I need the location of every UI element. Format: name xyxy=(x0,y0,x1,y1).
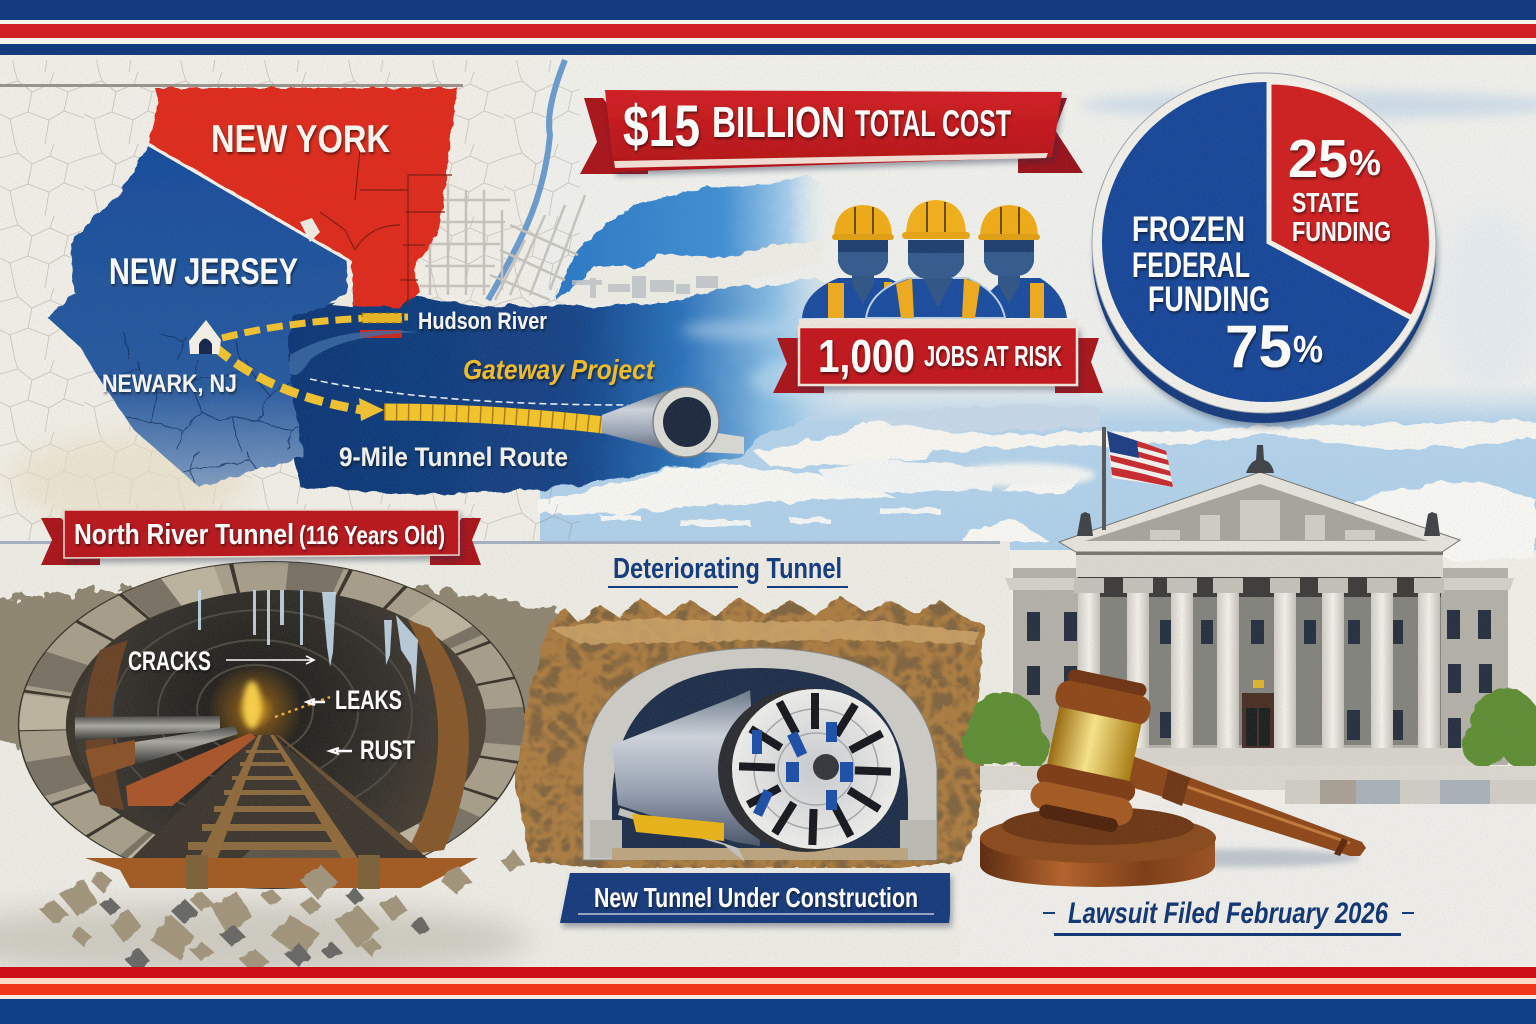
jobs number: 1,000 xyxy=(818,330,915,382)
label state funding xyxy=(1292,187,1391,247)
label: Hudson River: Hudson River xyxy=(418,308,547,335)
tunnel glow xyxy=(243,681,261,729)
label: Newark, NJ: NEWARK, NJ xyxy=(102,370,237,398)
callout: rust xyxy=(330,735,415,765)
columns xyxy=(1078,590,1440,748)
label: 9-Mile Tunnel Route: 9-Mile Tunnel Route xyxy=(339,442,568,472)
water: Hudson and bay xyxy=(280,280,870,495)
yellow tunnel route xyxy=(384,412,604,425)
door xyxy=(1242,680,1274,749)
brick wall xyxy=(0,590,565,770)
New York xyxy=(149,88,458,307)
lamp line xyxy=(275,697,330,717)
cost caption: TOTAL COST xyxy=(855,103,1011,144)
pie chart: funding xyxy=(1092,73,1436,423)
ballast xyxy=(240,850,355,860)
sky with clouds xyxy=(540,60,1536,560)
horizontal rule above map xyxy=(0,84,463,87)
banner: jobs at risk xyxy=(773,319,1103,393)
label frozen federal funding xyxy=(1132,210,1270,319)
label frozen federal funding: FUNDING xyxy=(1148,280,1270,319)
banner age: (116 Years Old) xyxy=(299,520,445,550)
city street grid xyxy=(420,180,585,300)
label: Gateway Project: Gateway Project xyxy=(463,354,655,385)
tunnel interior xyxy=(74,590,486,858)
New Jersey xyxy=(47,145,348,487)
plinth xyxy=(980,766,1536,804)
distant city blocks xyxy=(572,276,718,298)
railway xyxy=(186,735,420,885)
TBM support xyxy=(618,808,745,862)
heading: Deteriorating Tunnel: Deteriorating Tunnel xyxy=(613,553,842,585)
label state funding: FUNDING xyxy=(1292,216,1391,247)
upper bay xyxy=(556,175,840,300)
TBM cutter head xyxy=(718,688,900,852)
state slice 25% xyxy=(1269,82,1431,318)
TBM body xyxy=(612,690,760,846)
label 25 percent: 25 xyxy=(1288,129,1348,189)
label 25 percent xyxy=(1288,129,1381,189)
pipes xyxy=(75,716,238,778)
bottom-left ground haze xyxy=(0,902,530,978)
bottom stripes xyxy=(0,967,1536,1024)
land shading at map bottom xyxy=(10,435,250,525)
label 75 percent: 75 xyxy=(1225,313,1292,380)
rubble xyxy=(40,850,524,972)
icon: workers xyxy=(802,200,1067,318)
icon: Newark portal xyxy=(189,320,221,354)
caption: lawsuit filed: Lawsuit Filed February 2026 xyxy=(1068,897,1388,930)
soil top band xyxy=(550,618,980,644)
tunnel portal icon xyxy=(602,387,744,457)
callout: cracks: CRACKS xyxy=(128,646,211,676)
stone arch xyxy=(18,561,526,889)
flag and pole xyxy=(1102,427,1173,530)
worker right xyxy=(976,205,1067,318)
ties xyxy=(188,750,344,850)
arch banner: North River Tunnel xyxy=(41,510,481,565)
cost unit: BILLION xyxy=(712,98,845,147)
panel: new tunnel under construction xyxy=(515,553,985,923)
big rusty sleeper xyxy=(85,858,478,888)
steps xyxy=(1020,748,1476,768)
top stripes xyxy=(0,0,1536,55)
lower background band xyxy=(0,541,1010,971)
worker left xyxy=(802,205,925,318)
tunnel ribs xyxy=(112,610,412,820)
arrowhead xyxy=(359,398,384,421)
callout: leaks: LEAKS xyxy=(335,685,402,715)
rusty bench xyxy=(126,733,256,806)
banner title: North River Tunnel xyxy=(74,519,294,551)
plinth blocks xyxy=(1285,780,1536,804)
panel: old North River Tunnel xyxy=(0,510,565,972)
federal slice 75% xyxy=(1102,82,1430,402)
section rule xyxy=(0,541,1000,544)
label 25 percent: % xyxy=(1349,142,1381,183)
entablature xyxy=(1076,546,1443,577)
rails xyxy=(186,735,262,885)
concrete arch xyxy=(583,648,937,860)
label state funding: STATE xyxy=(1292,187,1359,218)
water leaks xyxy=(198,590,418,695)
tunnel crossing marker xyxy=(360,330,402,338)
callout: leaks xyxy=(307,685,402,715)
rust wall xyxy=(405,620,469,855)
track bed xyxy=(130,735,430,860)
icon: gavel xyxy=(980,666,1366,887)
banner: new tunnel xyxy=(560,873,950,923)
callout: rust: RUST xyxy=(360,735,415,765)
soil mass xyxy=(515,596,985,868)
route: dashed line to tunnel xyxy=(215,347,362,410)
windows xyxy=(1027,610,1492,748)
label 75 percent: % xyxy=(1293,329,1323,371)
label: New York: NEW YORK xyxy=(211,118,390,161)
shadow xyxy=(1120,849,1360,867)
panel: federal courthouse xyxy=(962,427,1536,804)
column capitals xyxy=(1074,578,1444,593)
banner text: New Tunnel Under Construction xyxy=(594,882,918,913)
building wings xyxy=(1013,568,1508,765)
river xyxy=(488,60,565,300)
label frozen federal funding: FROZEN xyxy=(1132,210,1245,249)
banner: total cost xyxy=(580,90,1083,174)
white bay land xyxy=(561,240,825,304)
route: dashed line to Hudson River xyxy=(222,317,408,338)
label 75 percent xyxy=(1225,313,1323,380)
ground xyxy=(960,800,1536,965)
state border line xyxy=(149,145,351,307)
finials xyxy=(1077,445,1440,536)
cost amount: $15 xyxy=(623,94,700,159)
label: New Jersey: NEW JERSEY xyxy=(109,251,298,292)
sound block xyxy=(980,807,1216,887)
crossing connector xyxy=(362,313,402,323)
bay inlet xyxy=(290,331,420,375)
trees xyxy=(962,688,1536,769)
pediment xyxy=(1059,472,1460,555)
portico wall xyxy=(1078,575,1441,745)
head xyxy=(1026,666,1160,836)
jobs caption: JOBS AT RISK xyxy=(924,341,1062,373)
cracked land texture xyxy=(0,60,580,540)
panel: map xyxy=(47,60,870,495)
dashed line in bay xyxy=(310,379,628,405)
label frozen federal funding: FEDERAL xyxy=(1132,246,1250,285)
handle xyxy=(1125,755,1366,856)
callout: cracks xyxy=(128,646,314,676)
water highlights xyxy=(680,320,830,398)
worker center xyxy=(866,200,1005,318)
